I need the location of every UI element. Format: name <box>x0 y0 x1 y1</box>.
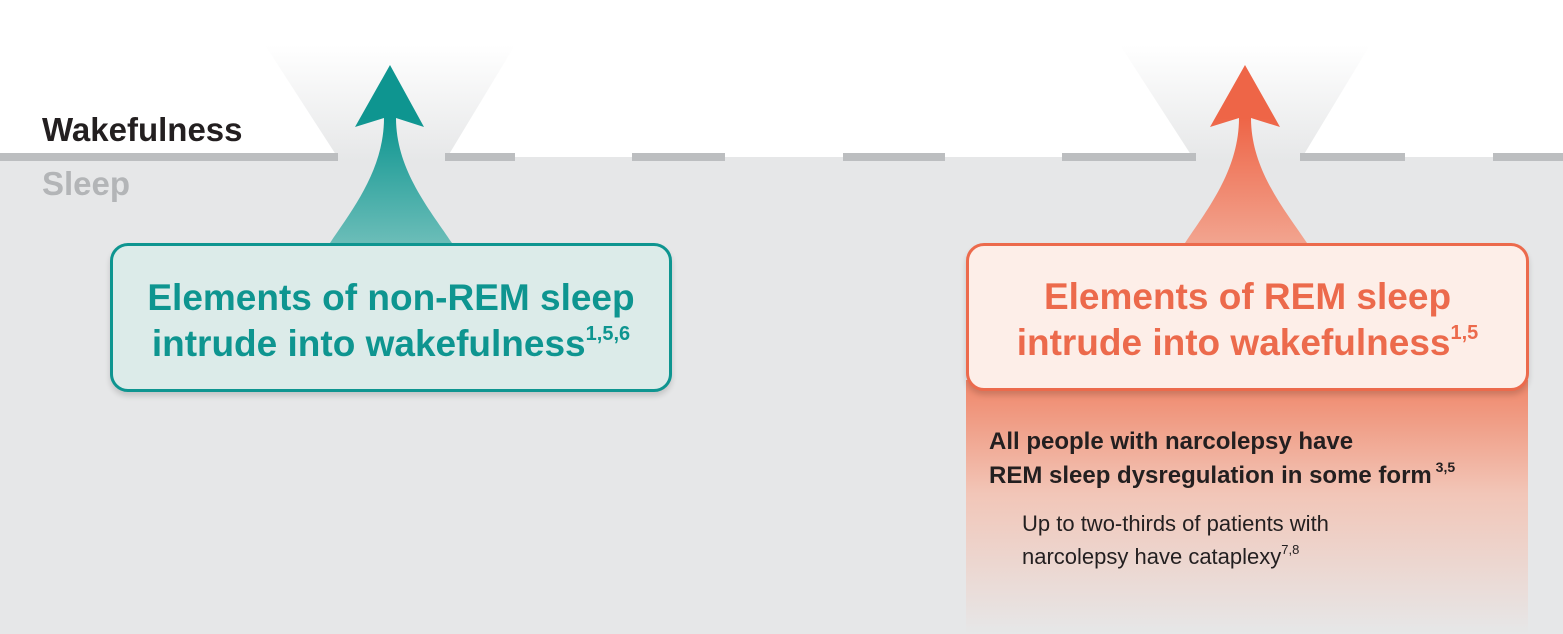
dashed boundary <box>0 153 1563 161</box>
arrow: teal <box>330 65 452 243</box>
text: cataplexy: narcolepsy have cataplexy7,8 <box>1022 542 1299 569</box>
arrow: orange <box>1185 65 1307 243</box>
text: cataplexy <box>1022 511 1329 569</box>
text: REM dysregulation <box>989 428 1455 489</box>
box: non-REM: Elements of non-REM sleep <box>147 276 635 318</box>
box: REM: intrude into wakefulness1,5 <box>1017 322 1478 363</box>
text: cataplexy: Up to two-thirds of patients with <box>1022 511 1329 536</box>
sleep background <box>0 157 1563 634</box>
funnels <box>265 45 515 161</box>
box: REM <box>966 243 1529 391</box>
text: REM dysregulation: REM sleep dysregulation in some form 3,5 <box>989 459 1455 489</box>
box: REM: Elements of REM sleep <box>1044 276 1451 317</box>
box: non-REM <box>110 243 672 392</box>
text: REM dysregulation: All people with narcolepsy have <box>989 428 1353 455</box>
label: wakefulness: Wakefulness <box>42 111 243 148</box>
orange column <box>966 380 1528 634</box>
box: non-REM: intrude into wakefulness1,5,6 <box>152 322 630 364</box>
label: sleep: Sleep <box>42 165 130 202</box>
